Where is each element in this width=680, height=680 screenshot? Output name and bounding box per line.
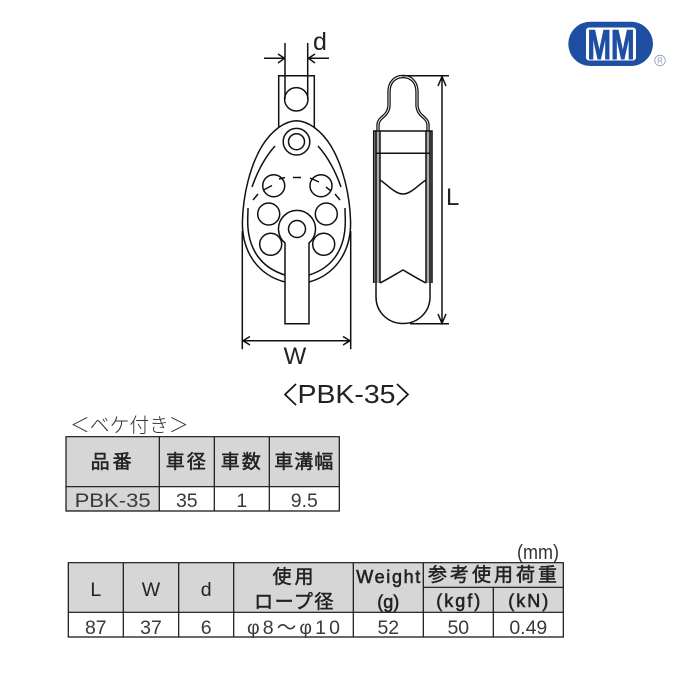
table: specifications: 使用 — [272, 562, 317, 589]
table: product: 車数 — [221, 447, 263, 474]
table: product: 35 — [176, 490, 198, 512]
table: specifications — [68, 560, 563, 639]
table: specifications: (kgf) — [436, 591, 480, 611]
caption: ＜ベケ付き＞ — [70, 409, 189, 438]
table: specifications: 0.49 — [509, 617, 547, 639]
logo: MM: MM — [588, 21, 634, 68]
pulley body — [242, 121, 351, 282]
table: product: 車径 — [166, 447, 208, 474]
side view drawing — [374, 76, 432, 324]
hook arm — [278, 210, 316, 324]
table: specifications: φ8～φ10 — [247, 617, 340, 639]
dimension L: L — [446, 184, 459, 211]
table: product: 1 — [236, 490, 247, 512]
front view drawing — [242, 76, 351, 324]
dimension L — [402, 76, 459, 324]
table: product: 9.5 — [291, 490, 318, 512]
table: specifications: d — [201, 579, 212, 601]
table: specifications: L — [90, 579, 101, 601]
table: specifications: 37 — [140, 617, 162, 639]
table: specifications: 参考使用荷重 — [428, 560, 560, 587]
table: specifications: (g) — [377, 592, 399, 612]
unit note: (mm) — [517, 542, 559, 564]
registered mark: R — [657, 56, 663, 66]
hook pivot — [288, 220, 306, 238]
table: specifications: 52 — [377, 617, 399, 639]
dimension d — [264, 28, 329, 99]
table: specifications: 6 — [201, 617, 212, 639]
table: specifications: (kN) — [508, 591, 548, 611]
model name: PBK-35 — [298, 379, 396, 409]
table: specifications: W — [142, 579, 161, 601]
dimension d: d — [313, 28, 327, 56]
table: product: 品番 — [91, 447, 135, 474]
table: specifications: Weight — [356, 567, 420, 587]
dimension W — [242, 231, 351, 370]
table: product: 車溝幅 — [274, 447, 334, 474]
table: specifications: ロープ径 — [254, 587, 335, 614]
table: specifications: 50 — [447, 617, 469, 639]
table: specifications: 87 — [85, 617, 107, 639]
dimension W: W — [284, 343, 307, 370]
shackle bracket — [279, 76, 314, 131]
table: product — [66, 437, 339, 512]
table: product: PBK-35 — [75, 490, 151, 512]
